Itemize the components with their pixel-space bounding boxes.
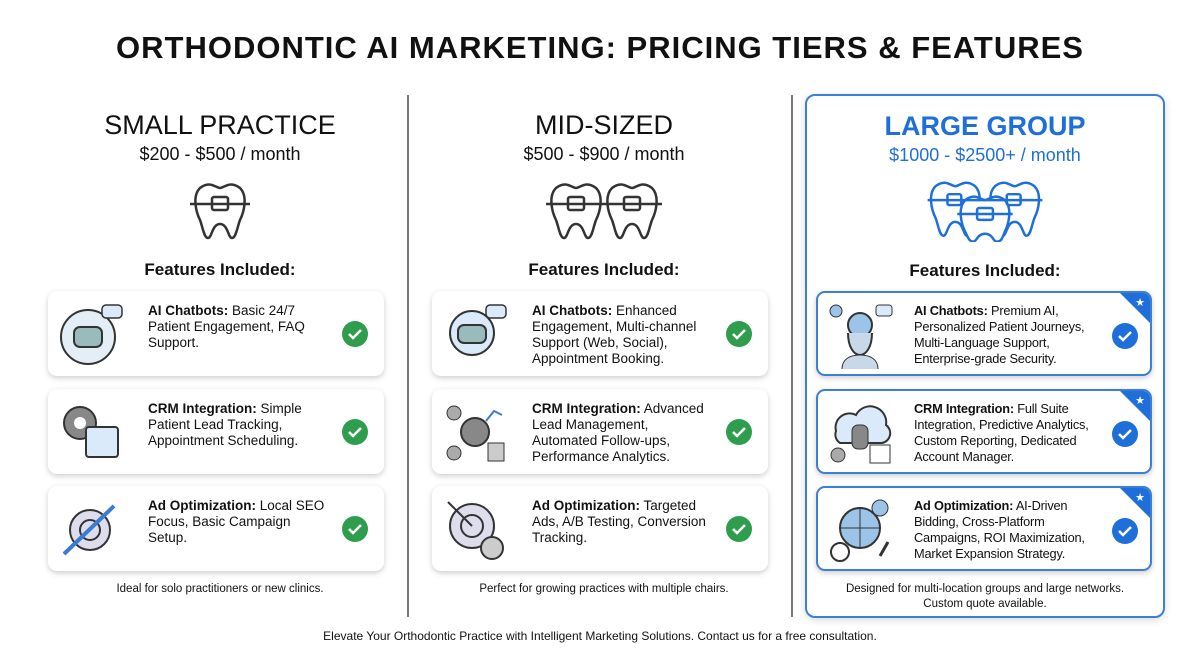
card: crm: CRM Integration: Advanced Lead Management, Automated Follow-ups, Performance Analytics. — [532, 401, 704, 464]
card: ads — [432, 486, 768, 571]
card: ads: Ad Optimization: AI-Driven Bidding, Cross-Platform Campaigns, ROI Maximization, Market Expansion Strategy. — [914, 498, 1085, 561]
note: large: Custom quote available. — [923, 598, 1047, 610]
heading: features: Features Included: — [144, 260, 296, 279]
badge: star: ★ — [1135, 492, 1145, 504]
icon: three teeth — [928, 182, 1042, 242]
icon: single tooth — [190, 183, 250, 240]
note: mid: Perfect for growing practices with multiple chairs. — [479, 583, 729, 595]
badge: star — [1120, 293, 1150, 323]
panel: mid-sized — [430, 110, 770, 595]
card: chatbots: AI Chatbots: Basic 24/7 Patient Engagement, FAQ Support. — [148, 303, 305, 350]
card: chatbots: AI Chatbots: Premium AI, Personalized Patient Journeys, Multi-Language Support, Enterprise-grade Security. — [914, 303, 1084, 366]
heading: small practice: SMALL PRACTICE — [104, 110, 336, 140]
card: crm — [432, 389, 768, 474]
badge: star — [1120, 391, 1150, 421]
card: ads: Ad Optimization: Local SEO Focus, Basic Campaign Setup. — [148, 498, 324, 545]
badge: star: ★ — [1135, 395, 1145, 407]
note: large — [846, 583, 1124, 610]
icon: two teeth — [546, 183, 662, 240]
note: large: Designed for multi-location groups and large networks. — [846, 583, 1124, 595]
card: crm — [48, 389, 384, 474]
badge: star — [1120, 488, 1150, 518]
card: ads — [816, 486, 1152, 571]
card: chatbots: AI Chatbots: Enhanced Engagement, Multi-channel Support (Web, Social), Appointment Booking. — [532, 303, 696, 366]
card: crm — [816, 389, 1152, 474]
footer: Elevate Your Orthodontic Practice with Intelligent Marketing Solutions. Contact us for a free consultation. — [323, 629, 877, 643]
badge: star: ★ — [1135, 297, 1145, 309]
note: small: Ideal for solo practitioners or new clinics. — [116, 583, 324, 595]
title: ORTHODONTIC AI MARKETING: PRICING TIERS & FEATURES — [116, 30, 1084, 65]
panel: small practice — [46, 110, 386, 595]
card: chatbots — [432, 291, 768, 376]
heading: features: Features Included: — [909, 261, 1061, 280]
heading: large group: LARGE GROUP — [884, 111, 1086, 141]
price: mid: $500 - $900 / month — [523, 144, 685, 164]
price: large: $1000 - $2500+ / month — [889, 145, 1081, 165]
heading: mid-sized: MID-SIZED — [535, 110, 673, 140]
card: crm: CRM Integration: Full Suite Integration, Predictive Analytics, Custom Reporting, Dedicated Account Manager. — [914, 401, 1089, 464]
card: chatbots — [48, 291, 384, 376]
heading: features: Features Included: — [528, 260, 680, 279]
card: chatbots — [816, 291, 1152, 376]
card: ads: Ad Optimization: Targeted Ads, A/B Testing, Conversion Tracking. — [532, 498, 706, 545]
card: ads — [48, 486, 384, 571]
panel: large group — [805, 94, 1165, 618]
card: crm: CRM Integration: Simple Patient Lead Tracking, Appointment Scheduling. — [148, 401, 302, 448]
price: small: $200 - $500 / month — [139, 144, 301, 164]
